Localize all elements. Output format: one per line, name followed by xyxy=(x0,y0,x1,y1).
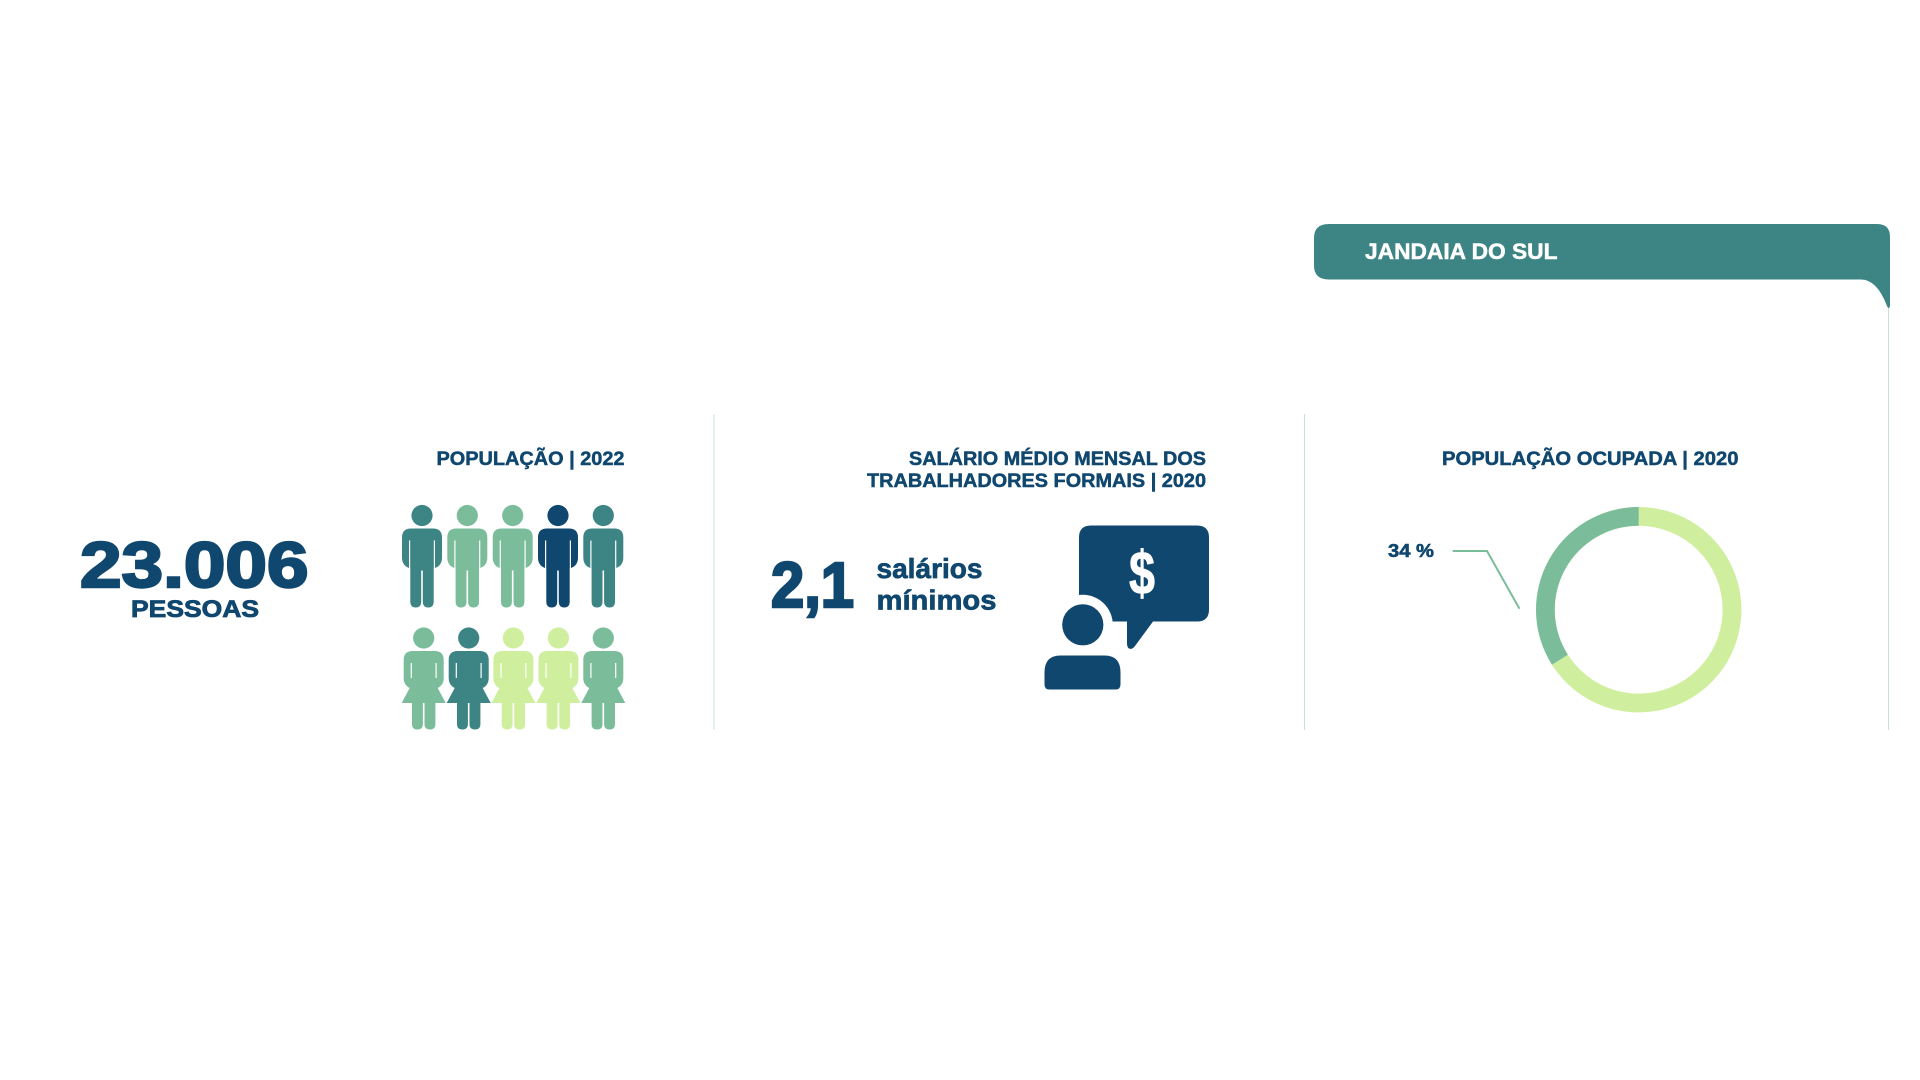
panel: employed population xyxy=(1388,447,1739,703)
heading: salário médio: TRABALHADORES FORMAIS | 2020 xyxy=(867,470,1206,492)
icon: person with dollar speech bubble: $ xyxy=(1129,539,1155,607)
icon row: men xyxy=(402,505,623,608)
label: salários mínimos xyxy=(876,553,996,616)
icon row: women xyxy=(402,627,625,730)
value label: 34 %: 34 % xyxy=(1388,540,1434,561)
big number: 23.006: 23.006 xyxy=(80,529,308,601)
panel: population xyxy=(80,447,625,730)
panel: salary xyxy=(771,447,1209,690)
donut chart: 34% xyxy=(1536,507,1732,703)
heading: salário médio: SALÁRIO MÉDIO MENSAL DOS xyxy=(909,447,1206,470)
header band: Jandaia do Sul xyxy=(1314,224,1890,308)
label: pessoas: PESSOAS xyxy=(131,596,259,623)
heading: população 2022: POPULAÇÃO | 2022 xyxy=(436,447,625,470)
panel divider: middle xyxy=(1304,414,1306,730)
leader line xyxy=(1453,551,1520,609)
heading: salário médio xyxy=(867,447,1206,492)
label: salários mínimos: mínimos xyxy=(876,584,996,616)
label: salários mínimos: salários xyxy=(876,553,982,584)
icon: person with dollar speech bubble xyxy=(1044,526,1209,690)
panel divider: left xyxy=(713,414,715,730)
big number: 2,1: 2,1 xyxy=(771,549,854,621)
heading: população ocupada: POPULAÇÃO OCUPADA | 2020 xyxy=(1442,447,1739,470)
panel border: right xyxy=(1888,300,1890,730)
header band: Jandaia do Sul: JANDAIA DO SUL xyxy=(1365,239,1558,264)
